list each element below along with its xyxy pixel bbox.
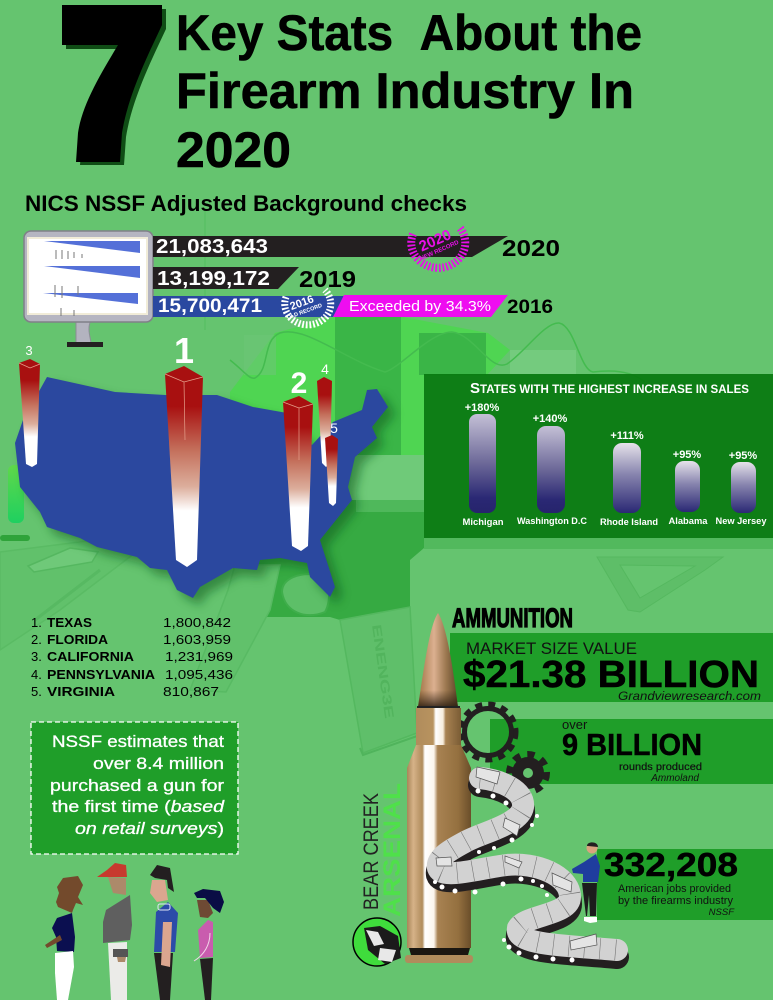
panel: rounds produced: rounds produced: [619, 762, 702, 773]
pillar 5: Virginia: 5: [330, 420, 338, 436]
title: 2020: [176, 122, 291, 178]
bar: 2020 checks: 21,083,643: [156, 236, 268, 258]
panel heading: STATES WITH THE HIGHEST INCREASE IN SALES: [470, 380, 749, 397]
bar: 2019 checks: [153, 266, 356, 292]
person 2: [97, 863, 132, 1000]
person 3: [150, 865, 178, 1000]
logo text: Bear Creek Arsenal: [360, 783, 406, 917]
list: top five states: VIRGINIA: [47, 684, 116, 699]
panel: jobs: American jobs provided: [618, 883, 731, 895]
pillar 2: Florida: 2: [291, 367, 307, 400]
callout: first time buyers: NSSF estimates that: [52, 732, 224, 751]
bar: 2020 checks: [153, 235, 560, 261]
bar: 2016 checks: 15,700,471: [158, 296, 262, 317]
bar: New Jersey: [716, 450, 767, 527]
list: top five states: 5.: [31, 684, 42, 699]
bar: 2020 checks: 2020: [502, 235, 560, 261]
heading: background checks: NICS NSSF Adjusted Background checks: [25, 191, 467, 216]
bar: 2019 checks: 13,199,172: [157, 268, 270, 290]
list: top five states: 2.: [31, 632, 42, 647]
pillar 3: California: 3: [25, 343, 33, 358]
list: top five states: 1,095,436: [165, 667, 233, 682]
list: top five states: TEXAS: [47, 615, 92, 630]
bar: Rhode Island: Rhode Island: [600, 517, 658, 528]
list: top five states: FLORIDA: [47, 632, 109, 647]
panel: jobs: 332,208: [604, 846, 738, 883]
logo text: Bear Creek Arsenal: BEAR CREEK: [360, 793, 383, 910]
badge: 2016 old record: [285, 290, 331, 325]
panel: market size value: $21.38 BILLION: [463, 654, 759, 696]
badge: 2020 new record: [411, 226, 465, 268]
panel: market size value: [450, 633, 773, 703]
icon: small gear: [510, 755, 546, 791]
bar: 2016 checks: Exceeded by 34.3%: [349, 298, 491, 315]
person 1: [45, 876, 83, 1000]
callout: first time buyers: the first time ( based: [52, 797, 225, 816]
list: top five states: 1.: [31, 615, 42, 630]
icon: large gear: [460, 704, 516, 760]
panel: market size value: MARKET SIZE VALUE: [466, 639, 637, 658]
badge: 2016 old record: OLD RECORD: [286, 303, 323, 321]
callout: first time buyers: over 8.4 million: [93, 754, 224, 773]
bar: Washington D.C: +140%: [533, 413, 567, 425]
panel: jobs: NSSF: [709, 907, 735, 918]
callout: first time buyers: [31, 722, 238, 854]
badge: 2016 old record: 2016: [288, 293, 316, 313]
bar: Michigan: Michigan: [462, 517, 504, 528]
bar: Michigan: [462, 402, 504, 528]
pillar 1: Texas: 1: [174, 330, 194, 371]
pillar 1: Texas: [165, 330, 203, 567]
pillar 5: Virginia: [325, 420, 338, 506]
bar: 2019 checks: 2019: [299, 266, 356, 292]
panel: rounds produced: Ammoland: [650, 773, 699, 784]
icon: computer monitor: [24, 231, 153, 347]
list: top five states: 1,231,969: [165, 649, 233, 664]
badge: 2020 new record: NEW RECORD: [419, 240, 460, 262]
pillar 2: Florida: [283, 367, 313, 551]
callout: first time buyers: on retail surveys ): [75, 819, 224, 838]
illustration: worker: [572, 842, 600, 923]
panel: market size value: Grandviewresearch.com: [618, 689, 761, 703]
bar: Alabama: Alabama: [668, 516, 708, 527]
person 4: [194, 889, 224, 1000]
logo: bear head: [353, 918, 401, 966]
panel: rounds produced: 9 BILLION: [562, 727, 702, 762]
panel: states with highest increase: [424, 374, 773, 538]
heading: ammunition: AMMUNITION: [452, 603, 573, 633]
panel: rounds produced: [490, 717, 773, 784]
bar: Washington D.C: Washington D.C: [517, 516, 587, 527]
pillar 3: California: [19, 343, 40, 467]
map: United States: [15, 377, 395, 605]
panel: jobs: by the firearms industry: [618, 895, 733, 907]
bar: Washington D.C: [517, 413, 587, 527]
bar: Michigan: +180%: [465, 402, 499, 414]
list: top five states: [31, 615, 233, 699]
illustration: conveyor belt: [433, 767, 617, 962]
bar: Rhode Island: +111%: [610, 430, 644, 442]
bar: 2016 checks: [153, 295, 553, 318]
illustration: bullet: [405, 613, 473, 963]
list: top five states: CALIFORNIA: [47, 649, 135, 664]
pillar 4: Pennsylvania: 4: [321, 361, 329, 377]
big number seven: [62, 5, 166, 165]
pillar 4: Pennsylvania: [317, 361, 332, 467]
title: [176, 5, 642, 178]
list: top five states: 1,800,842: [163, 615, 231, 630]
illustration: four people: [45, 863, 224, 1000]
panel: rounds produced: over: [562, 717, 588, 732]
badge: 2020 new record: 2020: [416, 226, 454, 255]
list: top five states: 4.: [31, 667, 42, 682]
list: top five states: 3.: [31, 649, 42, 664]
title: Key Stats About the: [176, 5, 642, 61]
title: Firearm Industry In: [176, 63, 634, 119]
list: top five states: 810,867: [163, 684, 219, 699]
panel: jobs: [597, 846, 773, 920]
bar: Alabama: [668, 449, 708, 527]
list: top five states: PENNSYLVANIA: [47, 667, 156, 682]
background rifle artwork: ENENG3E: [369, 623, 397, 720]
bar: 2016 checks: 2016: [507, 297, 553, 318]
list: top five states: 1,603,959: [163, 632, 231, 647]
bar: Alabama: +95%: [673, 449, 701, 461]
callout: first time buyers: purchased a gun for: [50, 776, 224, 795]
bar: Rhode Island: [600, 430, 658, 528]
logo text: Bear Creek Arsenal: ARSENAL: [379, 783, 406, 917]
bar: New Jersey: New Jersey: [716, 516, 767, 527]
background rifle artwork: [0, 210, 773, 755]
bar: New Jersey: +95%: [729, 450, 757, 462]
